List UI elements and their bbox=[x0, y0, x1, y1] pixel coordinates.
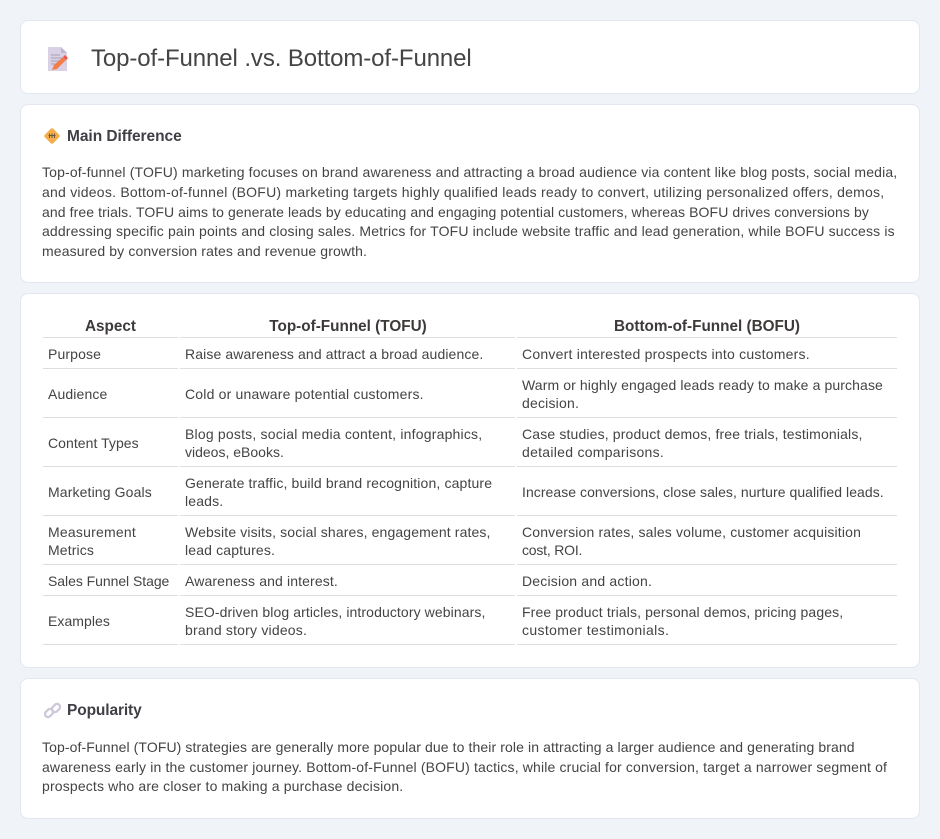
text block: main difference: measured by conversion rates and revenue growth. bbox=[42, 243, 367, 259]
row: sales funnel stage: Decision and action. bbox=[522, 573, 652, 589]
text block: main difference bbox=[42, 164, 897, 259]
panel: comparison table bbox=[20, 293, 920, 668]
row: sales funnel stage: Sales Funnel Stage bbox=[48, 573, 169, 589]
text block: popularity bbox=[42, 739, 887, 794]
row: measurement metrics: Conversion rates, sales volume, customer acquisition bbox=[522, 524, 861, 540]
table header: Bottom-of-Funnel (BOFU) bbox=[614, 318, 800, 335]
row: measurement metrics: Measurement bbox=[48, 524, 136, 540]
row: purpose: Purpose bbox=[48, 346, 101, 362]
row: content types bbox=[48, 426, 863, 460]
row: purpose bbox=[48, 346, 810, 362]
row: marketing goals: leads. bbox=[185, 493, 223, 509]
row: marketing goals: Generate traffic, build brand recognition, capture bbox=[185, 475, 492, 491]
text block: main difference: and videos. Bottom-of-funnel (BOFU) marketing targets highly qualified leads ready to convert, utilizing personalized offers, demos, bbox=[42, 184, 884, 200]
heading: popularity: Popularity bbox=[67, 702, 142, 719]
row: content types: videos, eBooks. bbox=[185, 444, 284, 460]
icon: warning diamond bbox=[44, 128, 60, 144]
row: examples bbox=[48, 604, 843, 638]
text block: popularity: awareness early in the customer journey. Bottom-of-Funnel (BOFU) tactics, while crucial for conversion, target a narrower segment of bbox=[42, 759, 887, 775]
text block: main difference: addressing specific pain points and closing sales. Metrics for TOFU include website traffic and lead generation, while BOFU success is bbox=[42, 223, 895, 239]
icon: chain link bbox=[44, 702, 61, 718]
row: audience: decision. bbox=[522, 395, 579, 411]
row: measurement metrics bbox=[48, 524, 861, 558]
row: examples: customer testimonials. bbox=[522, 622, 669, 638]
row: sales funnel stage bbox=[48, 573, 652, 589]
row: measurement metrics: Metrics bbox=[48, 542, 94, 558]
row: content types: detailed comparisons. bbox=[522, 444, 664, 460]
title: Top-of-Funnel .vs. Bottom-of-Funnel bbox=[91, 45, 472, 72]
table header: Top-of-Funnel (TOFU) bbox=[269, 318, 427, 335]
row: examples: SEO-driven blog articles, introductory webinars, bbox=[185, 604, 485, 620]
row: audience bbox=[48, 377, 883, 411]
row: measurement metrics: lead captures. bbox=[185, 542, 275, 558]
row: sales funnel stage: Awareness and interest. bbox=[185, 573, 338, 589]
row: audience: Cold or unaware potential customers. bbox=[185, 386, 424, 402]
row: marketing goals: Increase conversions, close sales, nurture qualified leads. bbox=[522, 484, 884, 500]
row: examples: brand story videos. bbox=[185, 622, 307, 638]
text block: popularity: prospects who are closer to making a purchase decision. bbox=[42, 778, 403, 794]
row: marketing goals bbox=[48, 475, 884, 509]
row: purpose: Convert interested prospects into customers. bbox=[522, 346, 810, 362]
row: content types: Content Types bbox=[48, 435, 139, 451]
heading: main difference: Main Difference bbox=[67, 128, 182, 145]
panel: title header bbox=[20, 20, 920, 94]
row: audience: Audience bbox=[48, 386, 107, 402]
row: examples: Free product trials, personal demos, pricing pages, bbox=[522, 604, 843, 620]
row: measurement metrics: Website visits, social shares, engagement rates, bbox=[185, 524, 491, 540]
icon: document with pencil bbox=[48, 47, 68, 71]
row: purpose: Raise awareness and attract a broad audience. bbox=[185, 346, 483, 362]
row: audience: Warm or highly engaged leads ready to make a purchase bbox=[522, 377, 883, 393]
row: examples: Examples bbox=[48, 613, 110, 629]
table header bbox=[85, 318, 800, 335]
panel: popularity bbox=[20, 678, 920, 819]
text block: popularity: Top-of-Funnel (TOFU) strategies are generally more popular due to their role in attracting a larger audience and generating brand bbox=[42, 739, 855, 755]
text block: main difference: Top-of-funnel (TOFU) marketing focuses on brand awareness and attracting a broad audience via content like blog posts, social media, bbox=[42, 164, 897, 180]
panel: main difference bbox=[20, 104, 920, 283]
row: content types: Blog posts, social media content, infographics, bbox=[185, 426, 482, 442]
text block: main difference: and free trials. TOFU aims to generate leads by educating and engaging potential customers, whereas BOFU drives conversions by bbox=[42, 204, 869, 220]
row: marketing goals: Marketing Goals bbox=[48, 484, 152, 500]
row: content types: Case studies, product demos, free trials, testimonials, bbox=[522, 426, 863, 442]
row: measurement metrics: cost, ROI. bbox=[522, 542, 582, 558]
table header: Aspect bbox=[85, 318, 136, 335]
